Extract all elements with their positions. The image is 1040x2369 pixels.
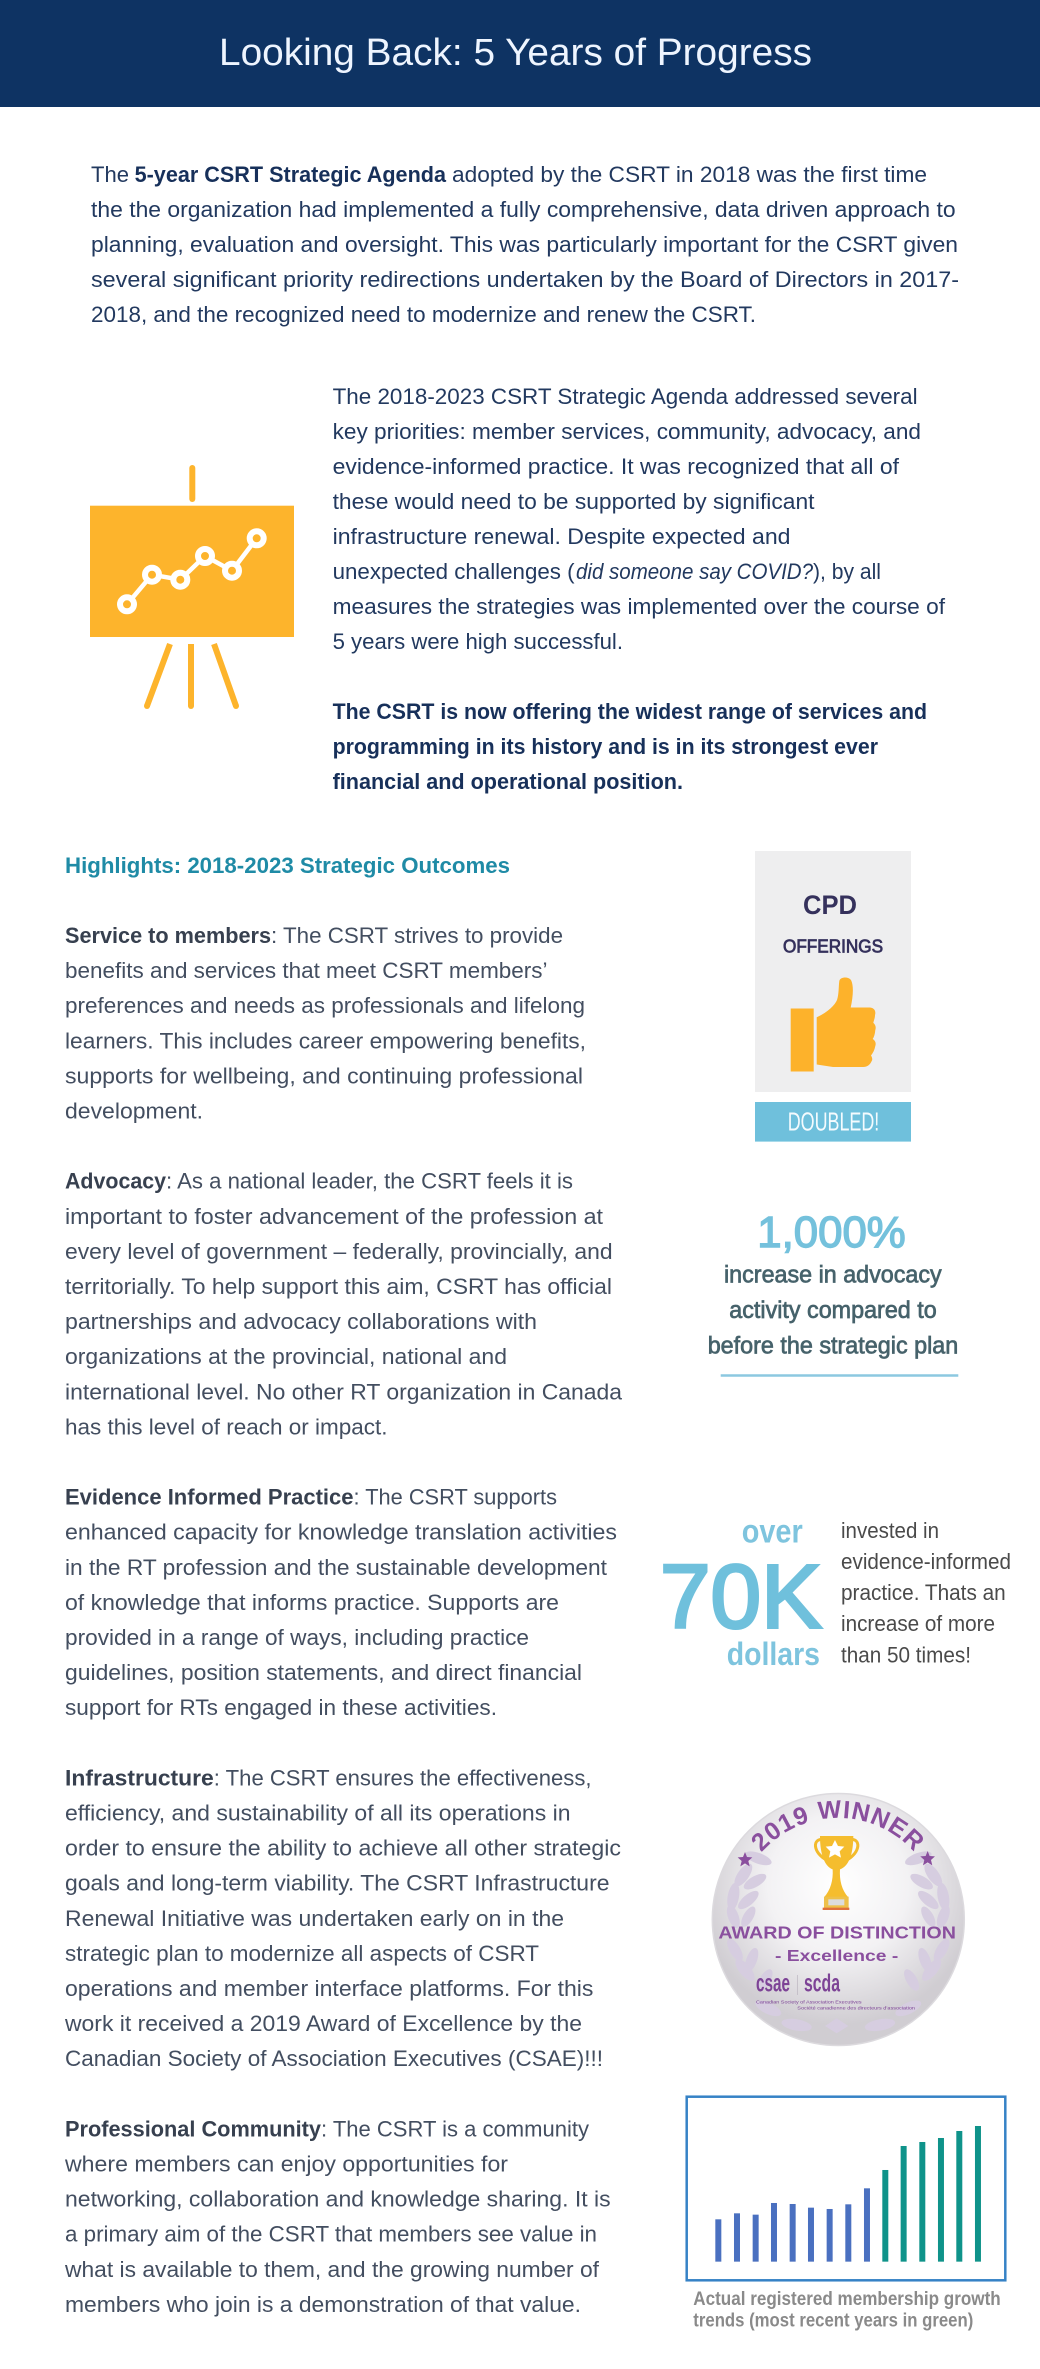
stat: 1,000% advocacy increase: [708, 1208, 958, 1376]
bold statement: The CSRT is now offering the widest range of services and: [333, 699, 927, 724]
stat: over 70K dollars: 70K: [660, 1548, 822, 1648]
text block: infrastructure: : The CSRT ensures the effectiveness,: [214, 1765, 592, 1790]
trophy: [815, 1836, 858, 1910]
priorities paragraph: evidence-informed practice. It was recognized that all of: [333, 454, 900, 479]
stat description: increase of more: [841, 1611, 995, 1636]
priorities paragraph: unexpected challenges (: [333, 559, 575, 584]
text block: evidence informed practice: Evidence Informed Practice: [65, 1485, 354, 1510]
bold statement: programming in its history and is in its strongest ever: [333, 734, 878, 759]
text block: evidence informed practice: guidelines, position statements, and direct financial: [65, 1660, 582, 1685]
priorities paragraph: these would need to be supported by significant: [333, 489, 814, 514]
bar chart: membership growth: [687, 2097, 1005, 2280]
text block: advocacy: organizations at the provincial, national and: [65, 1344, 507, 1369]
chart caption: Actual registered membership growth: [693, 2289, 1001, 2310]
excellence: - Excellence -: [775, 1948, 898, 1965]
icon: easel with line chart: [90, 468, 294, 709]
stat caption: activity compared to: [729, 1297, 937, 1324]
stat description: invested in: [841, 1518, 939, 1543]
intro paragraph: [91, 162, 959, 327]
csae scda logo: scda: [804, 1970, 841, 1998]
title: Looking Back: 5 Years of Progress: [219, 32, 812, 74]
text block: service to members: [65, 923, 586, 1124]
text block: service to members: benefits and services that meet CSRT members’: [65, 958, 548, 983]
intro paragraph: 2018, and the recognized need to modernize and renew the CSRT.: [91, 302, 756, 327]
earlier years bars: [715, 2188, 870, 2262]
text block: service to members: learners. This includes career empowering benefits,: [65, 1028, 586, 1053]
text block: service to members: preferences and needs as professionals and lifelong: [65, 993, 585, 1018]
stat: over 70K dollars: over: [742, 1513, 803, 1550]
heading: highlights: Highlights: 2018-2023 Strategic Outcomes: [65, 853, 510, 878]
text block: infrastructure: work it received a 2019 Award of Excellence by the: [64, 2011, 582, 2036]
text block: professional community: : The CSRT is a community: [321, 2116, 589, 2141]
doubled banner: [755, 1102, 911, 1142]
icon: thumbs up: [791, 977, 876, 1072]
stat: over 70K dollars: dollars: [727, 1636, 820, 1672]
csae scda logo: Canadian Society of Association Executives: [756, 1999, 862, 2004]
stat: over 70K dollars: [660, 1513, 1011, 1672]
text block: evidence informed practice: : The CSRT supports: [354, 1485, 557, 1510]
intro paragraph: The: [91, 162, 129, 187]
offerings label: OFFERINGS: [783, 936, 883, 956]
bold statement: [333, 699, 927, 794]
text block: advocacy: Advocacy: [65, 1169, 167, 1194]
intro paragraph: planning, evaluation and oversight. This was particularly important for the CSRT given: [91, 232, 958, 257]
text block: professional community: networking, collaboration and knowledge sharing. It is: [65, 2187, 611, 2212]
text block: advocacy: every level of government – federally, provincially, and: [65, 1239, 613, 1264]
CPD label: CPD: [803, 890, 857, 920]
stat caption: increase in advocacy: [724, 1262, 942, 1289]
text block: evidence informed practice: support for RTs engaged in these activities.: [65, 1695, 497, 1720]
text block: evidence informed practice: of knowledge that informs practice. Supports are: [65, 1590, 559, 1615]
text block: professional community: Professional Community: [65, 2116, 322, 2141]
text block: professional community: a primary aim of the CSRT that members see value in: [65, 2222, 597, 2247]
csae scda logo: [756, 1970, 916, 2010]
text block: infrastructure: Infrastructure: [65, 1765, 214, 1790]
text block: advocacy: partnerships and advocacy collaborations with: [65, 1309, 537, 1334]
text block: infrastructure: order to ensure the ability to achieve all other strategic: [65, 1836, 621, 1861]
intro paragraph: several significant priority redirections undertaken by the Board of Directors in 2017-: [91, 267, 959, 292]
text block: evidence informed practice: enhanced capacity for knowledge translation activities: [65, 1520, 617, 1545]
intro paragraph: 5-year CSRT Strategic Agenda: [135, 162, 447, 187]
text block: professional community: members who join is a demonstration of that value.: [65, 2292, 581, 2317]
text block: service to members: Service to members: [65, 923, 271, 948]
text block: professional community: what is available to them, and the growing number of: [64, 2257, 600, 2282]
text block: service to members: development.: [65, 1098, 203, 1124]
2019 winner arc: 2019 WINNER: [752, 1800, 923, 1852]
stat: 1,000% advocacy increase: 1,000%: [757, 1208, 906, 1257]
priorities paragraph: infrastructure renewal. Despite expected and: [333, 524, 790, 549]
text block: advocacy: has this level of reach or impact.: [65, 1414, 388, 1439]
intro paragraph: adopted by the CSRT in 2018 was the first time: [452, 162, 927, 187]
stat description: [841, 1518, 1011, 1668]
priorities paragraph: [333, 384, 946, 654]
award badge: [712, 1792, 965, 2046]
text block: infrastructure: strategic plan to modernize all aspects of CSRT: [65, 1941, 539, 1966]
text block: infrastructure: efficiency, and sustainability of all its operations in: [65, 1800, 570, 1826]
text block: professional community: where members can enjoy opportunities for: [64, 2152, 508, 2176]
text block: infrastructure: Renewal Initiative was undertaken early on in the: [65, 1906, 564, 1931]
csae scda logo: Société canadienne des directeurs d'association: [797, 2005, 916, 2010]
csae scda logo: csae: [756, 1970, 790, 1998]
panel: CPD offerings doubled: [755, 851, 911, 1142]
stat caption: [708, 1262, 958, 1360]
text block: infrastructure: goals and long-term viability. The CSRT Infrastructure: [65, 1871, 610, 1896]
text block: evidence informed practice: in the RT profession and the sustainable development: [65, 1555, 607, 1580]
priorities paragraph: 5 years were high successful.: [333, 629, 623, 654]
text block: service to members: supports for wellbeing, and continuing professional: [65, 1063, 583, 1088]
text block: evidence informed practice: provided in a range of ways, including practice: [65, 1625, 529, 1650]
text block: evidence informed practice: [65, 1485, 617, 1720]
text block: advocacy: territorially. To help support this aim, CSRT has official: [65, 1274, 612, 1299]
text block: professional community: [64, 2116, 611, 2317]
text block: advocacy: important to foster advancement of the profession at: [65, 1204, 603, 1229]
header banner: [0, 0, 1040, 107]
text block: advocacy: international level. No other RT organization in Canada: [65, 1379, 623, 1404]
award of distinction: AWARD OF DISTINCTION: [718, 1922, 956, 1942]
priorities paragraph: The 2018-2023 CSRT Strategic Agenda addressed several: [333, 384, 918, 409]
stat description: than 50 times!: [841, 1643, 971, 1668]
priorities paragraph: measures the strategies was implemented over the course of: [333, 594, 946, 619]
text block: infrastructure: [64, 1765, 621, 2071]
text block: advocacy: [65, 1169, 623, 1439]
recent years bars: [882, 2126, 981, 2262]
panel: CPD offerings doubled: DOUBLED!: [788, 1107, 879, 1137]
priorities paragraph: ), by all: [813, 559, 881, 584]
text block: infrastructure: Canadian Society of Association Executives (CSAE)!!!: [65, 2046, 603, 2071]
chart caption: trends (most recent years in green): [693, 2311, 973, 2332]
stat description: evidence-informed: [841, 1549, 1011, 1574]
text block: infrastructure: operations and member interface platforms. For this: [65, 1976, 593, 2001]
laurel wreath: [724, 1849, 953, 2033]
chart caption: [693, 2289, 1001, 2332]
priorities paragraph: key priorities: member services, community, advocacy, and: [333, 419, 921, 444]
bold statement: financial and operational position.: [333, 769, 683, 794]
stat description: practice. Thats an: [841, 1580, 1006, 1605]
text block: advocacy: : As a national leader, the CSRT feels it is: [166, 1169, 573, 1194]
text block: service to members: : The CSRT strives to provide: [271, 923, 563, 948]
stat caption: before the strategic plan: [708, 1333, 958, 1360]
stars: [738, 1851, 935, 1866]
priorities paragraph: did someone say COVID?: [576, 559, 814, 584]
intro paragraph: the the organization had implemented a fully comprehensive, data driven approach to: [91, 197, 956, 222]
